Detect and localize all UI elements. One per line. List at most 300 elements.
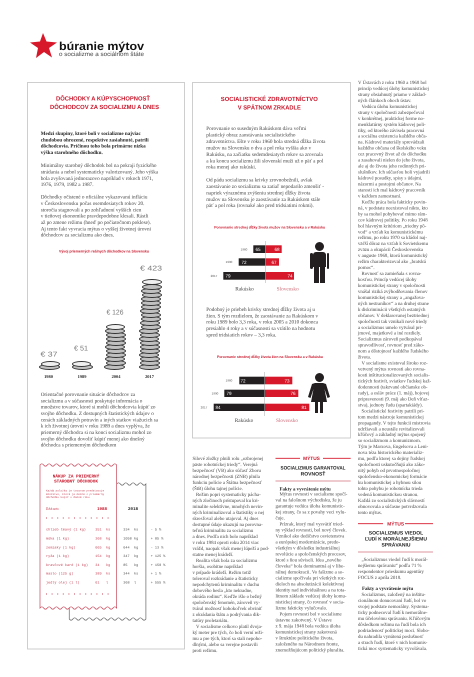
body text: comparison: priemerný dôchodca si na konci socializmu mohol zo — [41, 430, 152, 436]
paragraph: security forces: funkciu polície a Štátna bezpečnosť — [192, 479, 262, 486]
year labels: 1990 — [212, 392, 219, 396]
coin value labels: € 423 — [140, 266, 162, 272]
body text: Austria comparison: zdravotníctva. Ešte v roku 1960 bola stredná dĺžka života — [206, 138, 326, 145]
myth text: Vznikol ako dedičstvo osvietenstva — [276, 534, 345, 540]
receipt infographic — [40, 464, 166, 620]
text column: right: komunistickej strany v spoločnosti — [358, 283, 426, 289]
myth text: dieloch na absolutizácii kolektívnej — [276, 582, 344, 588]
year labels: 2004 — [112, 374, 121, 379]
receipt title — [53, 474, 100, 485]
text column: right: kosťou. Princíp vedúcej úlohy — [358, 277, 417, 283]
myth label: MÝTUS — [303, 455, 321, 462]
myth quote: „Socializmus viedol ľudí k morál- — [362, 557, 428, 563]
myth text: ústavne zakotvený. V Ústave — [276, 617, 332, 624]
body text: after socialism: napriek výraznému zvýšeniu strednej dĺžky života — [206, 189, 311, 196]
receipt rows 1988: ks — [106, 528, 110, 533]
legend — [235, 286, 299, 292]
receipt title: NÁKUP ZA PRIEMERNÝ — [53, 474, 100, 480]
text column: right: väčší dôraz na vzťah k Sovietskemu — [358, 241, 429, 247]
paragraph: security forces: vrážd, naopak však menej lúpeží a pod- — [192, 546, 270, 552]
paragraph: security forces: spoločenský fenomén, zároveň vy- — [192, 600, 260, 606]
body text: inflation: v tieňovej ekonomike pravdepodobne klesali. Rástli — [41, 214, 149, 220]
text column: right: Vedúcu úlohu komunistickej — [362, 104, 417, 110]
myth text: Prízrak, ktorý mal vysvätiť tried- — [280, 522, 344, 528]
bar values: 65 — [255, 247, 261, 252]
myth heading: SOCIALIZMUS VIEDOL — [369, 530, 423, 536]
text column: right: vedená komunistickou stranou. — [358, 492, 418, 498]
myth heading — [280, 466, 346, 477]
text column: right: názormi a postojmi občanov. Na — [358, 181, 422, 187]
myth text: človeka“ bola dominantná aj v libe- — [276, 564, 345, 570]
text column: right: rady), a osláv práce (1. máj), bojovej — [358, 390, 429, 396]
body text: Austria comparison: a ku koncu socializmu žili slovenskí muži už o päť a pol — [206, 158, 324, 164]
text column: right: tom medzi nástroje komunistickej — [358, 414, 424, 420]
body text: after socialism: päť a pol roka (rovnaké ako pred tridsiatimi rokmi). — [206, 203, 314, 209]
year labels: 2017 — [201, 406, 208, 410]
text column: right: cez pracovný život až do dôchodku — [358, 152, 427, 158]
myth text: val na falošnom východisku, že ju — [276, 498, 342, 504]
receipt rows 2018: - 13 % — [151, 545, 164, 550]
text column: right: v konkrétnej, praktickej forme no- — [358, 116, 425, 122]
bar values: 68 — [274, 247, 280, 252]
coin stack 2017 — [139, 279, 162, 370]
text column: right: tento mýtus. — [358, 510, 382, 516]
myth text: nistickej strany, čo rovnosť v socia- — [276, 600, 345, 606]
heading: pensions — [50, 94, 159, 111]
paragraph: security forces: ký meter pre tých, čo boli verní reži- — [192, 630, 264, 636]
bar values: 76 — [290, 391, 296, 396]
body text: comparison: množstve tovarov, ktoré si mohli dôchodcovia kúpiť zo — [41, 405, 156, 411]
text column: right: vnášal riziká zvýhodňovania členov — [358, 289, 428, 295]
text column: right: kádrové posudky, spisy s údajmi, — [358, 176, 422, 182]
body text: pension level: 1976, 1979, 1982 a 1987. — [41, 182, 94, 188]
receipt rows 2018: + 125 % — [151, 554, 166, 559]
receipt header row: 1988 — [97, 507, 108, 512]
legend: Slovensko — [277, 286, 299, 292]
body text: inflation: Dôchodky očistené o oficiálne vykazovanú infláciu — [41, 195, 148, 201]
receipt rows 1988: múka (1 kg) — [46, 536, 69, 541]
body text: pension level: Minimálny starobný dôchodok bol na pokraji fyzického — [41, 163, 157, 169]
coin value labels: € 51 — [74, 346, 88, 352]
text column: right: režimu, po roku 1970 sa kládol naj- — [358, 235, 427, 241]
text column: right: ale aj do života jeho rodinných pri- — [358, 164, 426, 170]
myth text: revolúcie a spoločenských procesov, — [276, 552, 346, 558]
body text: inflation: až po zmene režimu (hneď po počiatočnom poklese). — [41, 220, 151, 226]
icon: woman — [308, 373, 330, 413]
bars Austria — [214, 377, 265, 411]
text column: right: spoločensko-ekonomickej formácie — [358, 474, 427, 480]
myth text: ticky podnecoval ľudí k nemorálne- — [358, 610, 428, 616]
text column: right: v auguste 1968, ktorú komunistický — [358, 253, 428, 259]
paragraph: security forces: V socialisme celkovo platil dvoja- — [196, 624, 263, 630]
bar values: 73 — [284, 378, 290, 383]
text column: right: Socializmus zároveň podkopával — [358, 337, 423, 343]
receipt rows 1988: chlieb tmavý (1 kg) — [46, 528, 86, 533]
myth text: dôsledkom režimu na ľudí bola ich — [358, 622, 426, 628]
myth text: identity nad individuálnou a na tota- — [276, 588, 346, 594]
chart: male life expectancy — [211, 224, 325, 292]
facts heading: Fakty a vyvrátenie mýtu — [362, 586, 413, 592]
receipt rows 1988: 351 — [95, 528, 102, 533]
text column: right: života. — [358, 355, 371, 361]
paragraph: security forces: horšia, osobitne napríklad — [192, 564, 243, 570]
myth text: tická moc systematicky vyvolávala. — [358, 646, 427, 652]
receipt rows 1988: jedlý olej (1 l) — [46, 581, 80, 586]
body text: women: presiahlo 4 roky a v súčasnosti sa vrátilo na hodnotu — [206, 326, 315, 332]
heading: pensions: DÔCHODCOV ZA SOCIALIZMU A DNES — [50, 103, 159, 111]
legend: Rakúsko — [235, 418, 254, 424]
text column: right: strany obsiahnutý priamo v základ- — [358, 92, 427, 98]
text column: right: a sociálna existencia každého obča- — [358, 134, 428, 140]
body text: women: roku 1989 bolo 3,3 roka, v roku 2005 a 2010 dokonca — [206, 320, 319, 326]
text column: right: dodennosti (takzvané občianske ob- — [358, 384, 428, 390]
receipt rows 1988: 34 — [95, 563, 100, 568]
bar values: 72 — [241, 260, 247, 265]
coin stack 2004 — [104, 324, 126, 370]
receipt rows 2018: kg — [134, 545, 138, 550]
receipt header row — [46, 507, 139, 512]
text column: right: ku komunistickej a hybnou silou — [358, 480, 422, 486]
lead text: výška starobného dôchodku. — [41, 150, 103, 156]
text column: right: V Ústavách z roku 1960 a 1968 bol — [358, 79, 427, 86]
bar values: 84 — [215, 405, 221, 410]
logo subtitle: o socializme a sociálnom štáte — [59, 51, 145, 58]
text column: right: a zasahovali nielen do jeho života, — [358, 158, 425, 164]
body text: comparison: svojho dôchodku. Z dostupných štatistických údajov o — [41, 411, 154, 417]
receipt: 1988 red — [40, 464, 117, 609]
text column: right: tických festivít, sviatkov ľudskej kaž- — [358, 379, 432, 385]
receipt header row: Dátum: — [46, 507, 60, 512]
bar values: 79 — [225, 274, 231, 279]
chart: pension labels — [40, 250, 162, 379]
body text: women: spred tridsiatich rokov – 3,3 roka. — [206, 332, 276, 338]
bars Slovakia — [265, 377, 309, 411]
paragraph: security forces: v prípade krádeží. Režim totiž — [192, 570, 252, 576]
receipt rows 2018: l — [134, 581, 136, 586]
receipt rows 2018: + 85 % — [151, 536, 164, 541]
text column: right: vod“ a vzťah ku komunistickému — [358, 229, 423, 235]
heading: pensions: DÔCHODKY A KÚPYSCHOPNOSŤ — [56, 94, 150, 102]
body text: comparison: k ich životnej úrovni v roku 1989 a dnes vyplýva, že — [41, 424, 150, 430]
year labels: 1960 — [241, 247, 248, 251]
year labels: 1989 — [78, 374, 87, 379]
text column: right: Každá zo socialistických slávností — [358, 498, 425, 504]
paragraph: security forces: tváral možnosť kohokoľvek obviniť — [192, 606, 262, 612]
myth text: litnom základe vedúcej úlohy komu- — [276, 594, 347, 600]
text column: right: bol hlavným kritériom „triedny pô- — [358, 223, 427, 229]
lead text: Medzi skupiny, ktoré boli v socializme najviac — [41, 131, 141, 137]
paragraph: security forces: v roku 1984 oproti roku 2014 viac — [192, 540, 259, 546]
receipt rows 1988: zemiaky (1 kg) — [46, 545, 75, 550]
receipt rows 1988: l — [106, 581, 108, 586]
text column: right: spoločnosti tak vznikali nové triedy — [358, 319, 428, 325]
myth label: MÝTUS — [387, 520, 405, 527]
receipt rows 1988: 368 — [95, 536, 102, 541]
receipt rows 1988: kg — [106, 554, 110, 559]
body text: comparison: socializmu a v súčasnosti poskytuje informácia o — [41, 398, 143, 404]
receipt rows 1988: ryža (1 kg) — [46, 554, 69, 559]
paragraph: security forces: okráda rodinu“. Keďže išlo o bežný — [192, 594, 262, 600]
myth text: čuje. — [276, 516, 285, 522]
lead text: chudobou ohrozené, respektíve zasiahnuté, patrili — [41, 137, 149, 143]
paragraph: security forces: skresľoval alebo utajoval. Aj dnes — [192, 516, 258, 522]
myth text: Mýtus rovnosti v socialisme spočí- — [280, 492, 348, 498]
body text: comparison: dôchodca s priemerným dôchodkom — [41, 443, 116, 449]
receipt rows 1988: 665 — [95, 545, 102, 550]
myth box: morality — [358, 520, 433, 652]
receipt rows 2018: ks — [134, 572, 138, 577]
myth text: a európskej modernizácie, predo- — [276, 540, 340, 546]
myth text: všetkým v dôsledku industriálnej — [276, 546, 340, 552]
paragraph: security forces: Silové zložky plnili rolu „ozbrojenej — [192, 456, 263, 462]
receipt rows 2018: + 150 % — [151, 563, 166, 568]
myth text: svojej podstate nemorálny. Systema- — [358, 604, 429, 610]
paragraph: security forces: a dnes. Podľa nich bolo napríklad — [192, 534, 258, 540]
paragraph: security forces: bezpečnosť (VB) ako súčasť Zboru — [192, 468, 262, 474]
text column: right: mu, podľa ktorej sa dejiny ľudskej — [358, 456, 425, 462]
myth text: znemožňujúcom politický pluralita. — [276, 648, 345, 654]
receipt rows 1988: 389 — [95, 572, 102, 577]
myth heading: SPRÁVANIU — [381, 542, 411, 548]
coin value labels: € 126 — [106, 310, 124, 316]
receipt rows 2018: 334 — [123, 528, 130, 533]
receipt rows 2018: 368 — [123, 581, 130, 586]
receipt rows 1988: ks — [106, 572, 110, 577]
text column: right: so socializmom a komunizmom. — [358, 438, 421, 444]
paragraph: security forces: (ŠtB) úlohu tajnej polície. — [192, 485, 243, 492]
receipt rows 1988: kg — [106, 563, 110, 568]
body text: inflation: storočia stagnovali a po zohľadnení vyšších cien — [41, 207, 142, 213]
paragraph: security forces: ných zločinoch prístupoval ku kri- — [192, 498, 260, 504]
bar values: 79 — [226, 391, 232, 396]
year labels: 2017 — [211, 274, 218, 278]
receipt rows 2018 — [123, 528, 166, 586]
receipt rows 2018: - 5 % — [151, 528, 162, 533]
text column: right: v každom zamestnaní. — [358, 193, 401, 199]
chart title: Porovnanie strednej dĺžky života mužov na Slovensku a v Rakúsku — [214, 224, 325, 230]
paragraph: security forces: proti režimu. — [192, 648, 218, 654]
body text: comparison: cenách základných potravín a iných statkov viažucich sa — [41, 417, 159, 423]
dotted separators — [46, 518, 111, 594]
myth text: cionálnom donucovaní ľudí, bol vo — [358, 598, 427, 604]
receipt rows 2018: kg — [134, 554, 138, 559]
paragraph: security forces: toleroval rozkrádanie a štatisticky — [192, 576, 259, 582]
receipt intro: množstvo, ktoré je možné z priemerný — [46, 493, 104, 496]
chart title: Porovnanie strednej dĺžky života žien na Slovensku a v Rakúsku — [217, 354, 323, 359]
chart title: Vývoj priemerných reálnych dôchodkov na Slovensku — [59, 250, 150, 254]
body text: after socialism: zaostávanie zo socializmu sa zatiaľ nepodarilo zmenšiť - — [206, 184, 324, 190]
receipt rows 2018: ks — [134, 528, 138, 533]
text column: right: propagandy. V tejto funkcii mistrovia — [358, 420, 431, 426]
myth text: ny výklad rovnosti, bol nový človek. — [276, 528, 347, 534]
text column: right: nom a dôstojnosť každého ľudského — [358, 349, 429, 355]
text column: right: každého občana od školského veku — [358, 146, 427, 152]
text column: right: nitý pohyb od prvotnospoločnej — [358, 468, 420, 474]
text column: right: pripravenosti (9. máj ako Deň víťaz- — [358, 396, 429, 402]
myth text: podriadenosť politickej moci. Slobo- — [358, 628, 430, 634]
paragraph: security forces: päste robotníckej triedy“. Verejná — [192, 462, 258, 468]
legend: Slovensko — [276, 418, 298, 424]
body text: comparison: svojho dôchodku dovoliť kúpiť menej ako dnešný — [41, 436, 145, 442]
text column: right: tohto pohybu je robotnícka trieda — [358, 486, 423, 492]
text column: right: pomoc“. — [358, 265, 375, 271]
text column: right: menklatúrny systém kádrovej poli- — [358, 122, 426, 128]
myth text: du nahradila vynútená poslušnosť — [358, 634, 423, 640]
coin value labels — [40, 266, 162, 358]
paragraph: security forces: národnej bezpečnosti (ZNB) plnila — [192, 474, 261, 480]
text column: right: Tým je Marxova, Engelsova a Leni- — [358, 444, 429, 450]
text column: right: spravodlivosť, rovnosť pred záko- — [358, 343, 425, 349]
bar values: 74 — [287, 274, 293, 279]
body text: women: Podobný je priebeh krivky strednej dĺžky života aj u — [206, 306, 315, 313]
paragraph: security forces: z okrádania štátu a podrývania dik- — [192, 612, 261, 618]
body text: inflation: dôchodcov za socializmu ako dnes. — [41, 233, 114, 239]
lead text: dôchodcovia. Príčinou toho bola primárne nízka — [41, 144, 146, 150]
bar values: 67 — [271, 260, 277, 265]
legend: Rakúsko — [235, 286, 254, 292]
body text: after socialism: Od pádu socializmu sa krivky zrovnobežnili, avšak — [206, 178, 313, 184]
text column: right: ných článkoch oboch ústav. — [358, 98, 412, 104]
heading: healthcare — [221, 95, 318, 112]
text column: right: na. Kádrové materiály sprevádzali — [358, 140, 425, 146]
myth heading: SOCIALIZMUS GARANTOVAL — [280, 466, 346, 472]
bar values: 72 — [240, 378, 246, 383]
myth text: z 9. mája 1948 bola vedúca úloha — [276, 624, 341, 630]
text column: right: obnovovala a súčasne potvrdzovala — [358, 504, 428, 510]
myth text: kej strany, čo sa z povahy veci vylu- — [276, 510, 346, 516]
receipt rows 2018: + 555 % — [151, 581, 166, 586]
body text: comparison: Orientačné porovnanie situácie dôchodcov za — [41, 392, 136, 398]
bar values — [215, 378, 307, 410]
receipt rows 1988: kg — [106, 545, 110, 550]
year labels — [211, 247, 248, 278]
text column: right: komunistickej strany a „angažova- — [358, 295, 426, 301]
myth text: a strach ľudí, ktoré v nich komunis- — [358, 640, 428, 646]
text column: right: ná, v podstate neexistoval nikto, kto — [358, 205, 428, 211]
receipt header row: 2018 — [128, 507, 139, 512]
text column: right: strany v spoločnosti zabezpečoval — [358, 110, 425, 116]
paragraph: security forces: tatúry proletariátu. — [192, 618, 229, 624]
receipt rows 1988: bravčové karé (1 kg) — [46, 563, 88, 568]
heading: healthcare: SOCIALISTICKÉ ZDRAVOTNÍCTVO — [221, 95, 318, 103]
myth text: rálnej demokracii. Vo fašizme a so- — [276, 570, 344, 576]
paragraph: security forces: statne menej krádeží. — [192, 552, 234, 558]
paragraph: security forces: nepodchytenú kriminalitu v duchu — [192, 582, 260, 588]
receipt intro: dôchodku kúpiť v danom roku — [46, 496, 90, 499]
body text: Austria comparison: Rakúsku, na začiatku sedemdesiatych rokov sa zrovnala — [206, 152, 324, 158]
coin stacks — [39, 279, 162, 370]
myth box: equality — [276, 455, 351, 654]
myth text: Pojem rovnosti bol v socialisme — [280, 612, 342, 618]
myth text: v štruktúre politického života, — [276, 636, 334, 642]
paragraph: security forces: dobového hesla „kto nekradne, — [192, 588, 252, 594]
logo — [30, 33, 145, 58]
paragraph: security forces: dlnými, alebo sa verejne postavili — [192, 642, 258, 648]
paragraph: security forces: teľnú kriminalitu za socializmu — [192, 528, 254, 534]
paragraph: security forces: Režim popri systematicky pácha- — [196, 492, 261, 498]
text column: right: a socializmus umelo vytváral pri- — [358, 325, 423, 331]
body text: pension level: bola zvyšovaná jednorazovo napríklad v rokoch 1971, — [41, 176, 153, 182]
receipt rows 2018: 344 — [123, 572, 130, 577]
text column: right: tiky, od ktorého závisela pracovná — [358, 128, 425, 134]
myth quote: respondentov prieskumu agentúry — [358, 569, 424, 575]
receipt title: STAROBNÝ DÔCHODOK — [54, 479, 98, 485]
bars Austria — [223, 245, 265, 280]
body text: Austria comparison: mužov na Slovensku o dva a pol roka vyššia ako v — [206, 145, 312, 151]
year labels: 2017 — [145, 374, 155, 379]
body text: pension level: strádania a nebol systematicky valorizovaný. Jeho výška — [41, 170, 159, 176]
body text: Austria comparison: plastický obraz zaostávania socialistického — [206, 132, 296, 138]
receipt rows 2018: kg — [134, 536, 138, 541]
text column: repression and crime — [192, 456, 271, 654]
receipt rows 1988: 61 — [95, 581, 100, 586]
myth quote: nejšiemu správaniu“ podľa 71 % — [358, 563, 422, 569]
body text: inflation: v Československu počas osemdesiatych rokov 20. — [41, 200, 144, 207]
receipt rows 2018: + 1 % — [151, 572, 162, 577]
receipt rows 1988: maslo (125 g) — [46, 572, 73, 577]
text column: right: by sa mohol pohybovať mimo rám- — [358, 211, 427, 217]
text column: right: nova téza historického materializ- — [358, 450, 424, 456]
body text: women: žien. S tým rozdielom, že zaostávanie za Rakúskom v — [206, 313, 318, 319]
receipt rows 2018: kg — [134, 563, 138, 568]
text column: right: slušníkov. Ich súčasťou boli vyjadrili — [358, 170, 431, 176]
myth quote: FOCUS z apríla 2018. — [358, 575, 401, 581]
year labels: 1980 — [44, 374, 54, 379]
coin stack 1989 — [72, 361, 93, 370]
myth text: založeného na Národnom fronte, — [276, 642, 339, 648]
text column: right: cov kádrovej politiky. Po roku 1948 — [358, 217, 428, 223]
text column: right: kľúčový a základný mýtus spojený — [358, 432, 426, 438]
receipt rows 2018: 85 — [123, 563, 128, 568]
receipt rows 2018: 644 — [123, 545, 130, 550]
myth text: garantuje vedúca úloha komunistic- — [276, 504, 345, 510]
body text: Austria comparison: Porovnanie so susedným Rakúskom dáva veľmi — [206, 126, 307, 132]
receipt rows 1988: kg — [106, 536, 110, 541]
receipt rows 1988 — [46, 528, 110, 586]
paragraph: security forces: Realita však bola za socializmu — [196, 558, 258, 564]
bar values: 81 — [301, 405, 307, 410]
paragraph: security forces: mu a pre tých, ktorí sa stali nepoho- — [192, 636, 263, 642]
myth text: lizme fakticky vylučovalo. — [276, 606, 327, 612]
paragraph: security forces: dostupné údaje ukazujú na porovna- — [192, 522, 263, 528]
year labels — [201, 379, 233, 410]
year labels — [44, 374, 155, 379]
receipt rows 2018: 1058 — [123, 536, 132, 541]
body text: after socialism: mužov na Slovensku je zaostávanie za Rakúskom stále — [206, 197, 321, 203]
receipt intro: Každá položka je tovarom predstavuje — [46, 490, 104, 492]
text column: right: starosti ich mal kádrový pracovník — [358, 187, 426, 193]
text column: right: k diskriminácii všetkých ostatných — [358, 307, 426, 313]
panel: healthcare — [192, 82, 350, 438]
text column: right: režim charakterizoval ako „bratskú — [358, 259, 426, 265]
receipt rows 1988: 154 — [95, 554, 102, 559]
paragraph: security forces: ných kriminalizoval a štatistiky o nej — [192, 510, 264, 516]
text column: right: občanov. V deklarovanej beztriednej — [358, 313, 429, 319]
bars Slovakia — [265, 245, 294, 280]
text column: right: V socialisme existoval široko roz- — [362, 361, 428, 367]
receipt: 2018 gray — [69, 483, 146, 620]
text column: right: stva), jednoty ľudu (spartakiády). — [358, 402, 423, 408]
paragraph: security forces: minalite selektívne, mnohých nevin- — [192, 504, 264, 510]
text column: right: Socialistické festivity patrili pri- — [362, 408, 425, 414]
heading: healthcare: V SPÄTNOM ZRKADLE — [238, 104, 301, 112]
myth heading — [365, 530, 427, 548]
coin stack 1980 — [39, 361, 60, 370]
panel: pensions — [28, 82, 184, 649]
text column: right: spoločnosti uskutočňujú ako záko- — [358, 462, 426, 468]
myth text: komunistickej strany zakotvená — [276, 630, 338, 636]
coin value labels: € 37 — [40, 352, 58, 358]
